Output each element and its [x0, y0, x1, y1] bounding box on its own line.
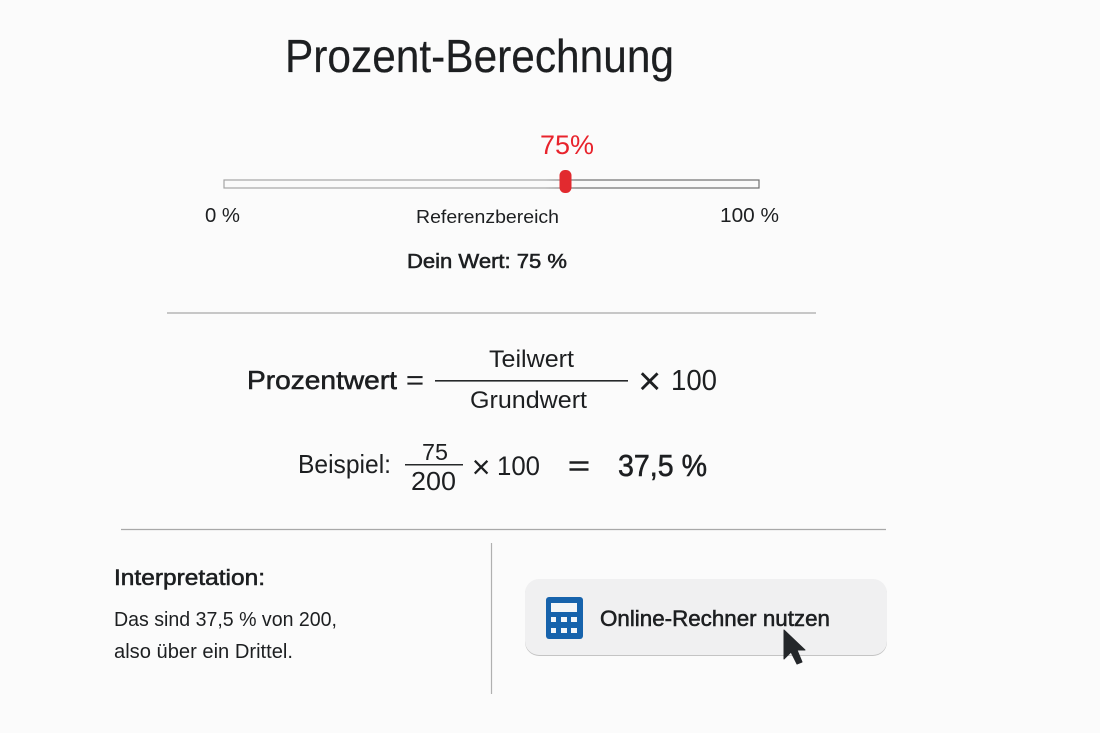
example label: Beispiel:	[298, 449, 391, 479]
slider value label: 75%	[540, 130, 594, 160]
fraction bar	[435, 380, 628, 382]
equals sign: =	[406, 365, 424, 395]
number 100: 100	[671, 365, 717, 397]
title: Prozent-Berechnung	[285, 30, 674, 82]
example denominator: 200	[411, 466, 456, 496]
icon: calculator	[546, 597, 583, 639]
interpretation text line 1: Das sind 37,5 % von 200,	[114, 609, 337, 631]
slider handle	[560, 170, 572, 193]
interpretation text line 2: also über ein Drittel.	[114, 641, 293, 663]
example equals: =	[568, 450, 590, 481]
slider track	[224, 180, 759, 188]
denominator: Grundwert	[470, 387, 587, 414]
formula	[247, 346, 717, 414]
label: 0 %: 0 %	[205, 205, 240, 227]
times sign: ×	[638, 360, 661, 404]
icon: mouse cursor	[784, 630, 805, 664]
example times sign: ×	[472, 449, 490, 485]
label: Dein Wert: Dein Wert: 75 %	[407, 251, 567, 273]
example numerator: 75	[422, 439, 448, 465]
panel: interpretation	[114, 565, 337, 663]
label: 100 %: 100 %	[720, 205, 779, 227]
numerator: Teilwert	[489, 346, 574, 373]
label: Referenzbereich: Referenzbereich	[416, 206, 559, 227]
example number 100: 100	[497, 451, 540, 481]
button background	[525, 580, 887, 656]
panel: slider	[205, 130, 779, 273]
interpretation heading: Interpretation:	[114, 565, 265, 590]
example fraction bar	[405, 464, 463, 466]
button label: Online-Rechner nutzen	[600, 606, 830, 631]
example	[298, 439, 707, 496]
button: Online-Rechner nutzen	[525, 579, 887, 664]
formula left side: Prozentwert	[247, 365, 398, 395]
example result: 37,5 %	[618, 448, 707, 483]
